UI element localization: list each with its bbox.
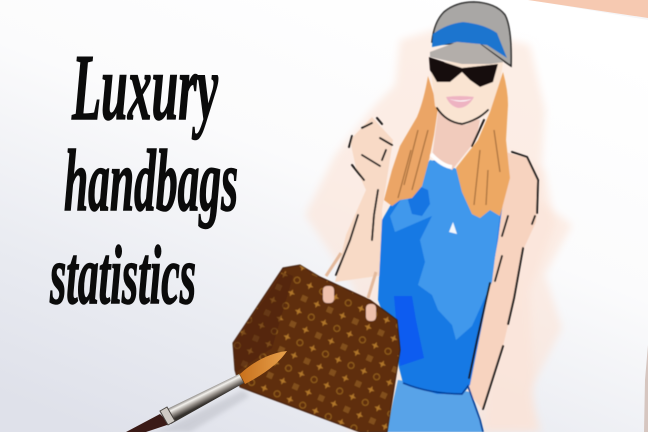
- ferrule ring: [160, 407, 175, 425]
- left hair: [384, 76, 438, 206]
- lips: [446, 96, 474, 108]
- right hair: [456, 72, 510, 218]
- cap dome: [432, 2, 511, 66]
- bag handles: [326, 253, 376, 298]
- ink lines: [336, 108, 538, 409]
- neck: [432, 112, 480, 170]
- left arm and fist: [335, 117, 393, 282]
- watercolor washes behind the figure: [305, 25, 572, 432]
- bag tabs: [323, 286, 376, 321]
- brush shadow: [150, 390, 250, 432]
- cap band: [432, 22, 507, 58]
- title line 1: Luxury: [71, 36, 218, 140]
- paper corner: peach desk at top right: [528, 0, 648, 18]
- dress light panel: [390, 160, 505, 340]
- brush bristles: [240, 351, 287, 384]
- figure: woman in blue dress: [335, 2, 539, 432]
- dress dark patch: [394, 296, 424, 366]
- paper edge at bottom right: [644, 345, 648, 432]
- bag body: [233, 265, 400, 432]
- brush handle: [126, 414, 170, 432]
- title: Luxury handbags statistics: statistics: [50, 229, 196, 322]
- title: Luxury handbags statistics: [50, 36, 238, 322]
- dress highlight: [449, 222, 457, 234]
- skirt: [386, 380, 483, 432]
- handbag: monogram bag: [233, 253, 400, 432]
- paintbrush: [126, 351, 287, 432]
- right arm: [468, 152, 539, 410]
- hair strands: [398, 130, 500, 205]
- illustration: watercolor painting on paper: handbags: [64, 133, 238, 230]
- neckline: [431, 154, 452, 167]
- smile: [449, 99, 472, 102]
- brush ferrule: [163, 374, 244, 424]
- cap visor: [430, 42, 504, 64]
- sunglasses: [429, 57, 498, 87]
- face: [430, 62, 503, 125]
- bag side panel: [234, 272, 293, 372]
- dress top: [378, 160, 505, 394]
- waistline: [403, 383, 483, 432]
- dress dark patch upper: [408, 184, 430, 216]
